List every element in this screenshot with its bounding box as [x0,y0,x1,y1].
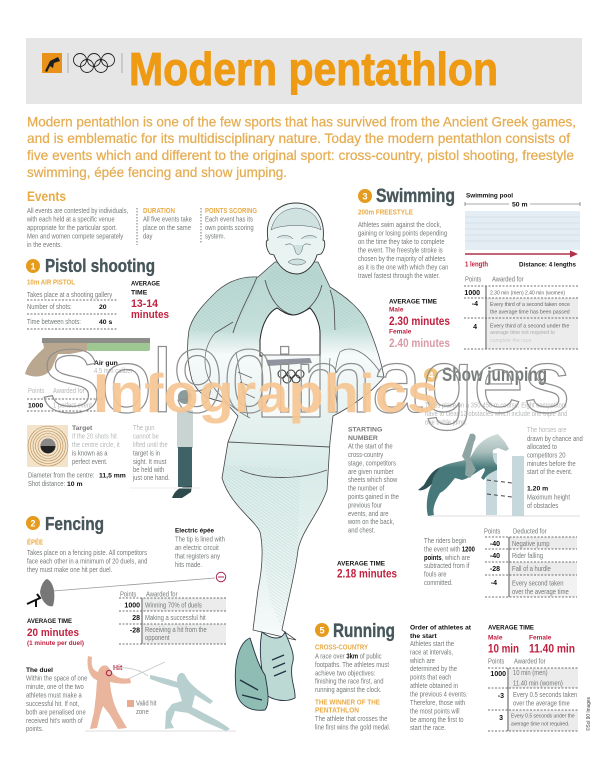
heading: fencing: 2 [30,518,36,528]
average time: (1 minute per duel) [27,640,84,647]
gun rule text [132,425,170,482]
average time: 13-14 [131,298,159,310]
freestyle description: gaining or losing points depending [358,230,447,238]
running average time: 2.18 minutes [337,566,397,580]
order of athletes: points that each [410,674,452,682]
average time: AVERAGE TIME [27,618,72,625]
horses text: drawn by chance and [527,436,583,443]
points table: -4 [472,301,478,308]
points table: Points [120,591,136,599]
points table: 1000 [464,290,480,297]
horses text: The horses are [527,427,567,434]
show jumping description: one treble jump. [425,419,467,427]
panel: events [26,188,257,249]
average time: Male [389,306,404,314]
electric épée: that registers any [175,553,221,561]
valid hit zone legend [127,700,157,716]
points table: Fall of a hurdle [512,566,551,573]
target text: is known as a [72,450,108,458]
Athens pictogram [42,53,62,73]
average time [389,298,450,350]
order of athletes: race at intervals, [410,649,453,657]
events description [26,208,128,249]
horses text [527,427,583,476]
pistol facts: Takes place at a shooting gallery [27,292,113,299]
order of athletes: Athletes start the [410,641,454,648]
average time: 2.30 minutes [389,314,450,328]
points table: Every third of a second under the [490,324,569,330]
average time: Male [488,634,503,642]
winner of the pentathlon: PENTATHLON [315,708,359,714]
points table [464,276,578,349]
duration: day [143,233,153,241]
heading: swimming [358,186,455,207]
freestyle description: Athletes swim against the clock, [358,222,441,229]
starting number text: sheets which show [348,477,398,484]
average time: AVERAGE [131,280,160,288]
shoe lacing [240,655,286,700]
starting number text [347,426,399,535]
the duel text: received hit's worth of [26,718,83,725]
average time: TIME [131,290,148,296]
target icon [27,425,68,467]
points table: Points [465,276,481,284]
épée description: face each other in a minimum of 20 duels, and [27,558,148,566]
heading: running: Running [333,621,395,642]
épée description: Takes place on a fencing piste. All competitors [27,550,147,557]
points table: Every third of a second taken once [490,302,570,308]
points scoring: POINTS SCORING [205,208,257,215]
red fencer [87,656,131,729]
the duel text: Within the space of one [26,675,88,683]
rider [462,434,476,478]
target measurements: 11,5 mm [99,472,126,480]
duration [143,208,192,241]
order of athletes: athlete obtained in [410,683,458,690]
intro text: Modern pentathlon is one of the few sports that has survived from the Ancient Greek games, [27,114,576,130]
horse tail [418,467,441,490]
target text: Target [72,425,93,432]
heading: fencing: Fencing [45,514,104,534]
panel: running [315,621,592,732]
winner of the pentathlon: THE WINNER OF THE [315,700,380,706]
blades [113,662,165,678]
gun rule text: The gun [133,425,155,432]
order of athletes: be among the first to [410,717,464,724]
fencers illustration [85,656,236,731]
heading: pistol shooting: Pistol shooting [45,256,155,276]
points table: 11.40 min (women) [513,680,563,688]
swimming pool diagram [465,192,580,268]
obstacle height: 1.20 m [527,486,548,492]
target text: perfect event. [72,459,108,466]
duration: All five events take [143,216,192,224]
freestyle description: chosen by the majority of athletes [358,256,445,263]
horses text: allocated to [527,444,557,451]
points table: 28 [132,615,140,622]
winner of the pentathlon: line first wins the gold medal. [315,724,391,732]
épée description: ÉPÉE [27,538,43,546]
target text: the centre circle, it [72,442,120,449]
points table: Every 0.5 seconds under the [511,714,575,720]
events description: Men and women compete separately [27,233,124,241]
runner left shoe [235,638,268,710]
target measurements [28,472,126,488]
horse and jump illustration [418,434,580,516]
points scoring: Each event has its [205,216,253,224]
points table: 10 min (men) [513,670,548,677]
average time [488,624,575,656]
runner illustration [188,203,384,710]
cross-country description: finishing the race first, and [315,678,384,686]
order of athletes: determined by the [410,666,457,673]
jump obstacle [486,453,524,516]
points table: Awarded for [514,658,546,666]
the duel text: athletes must make a [26,692,82,700]
electric épée [175,528,225,569]
target measurements: 10 m [67,481,82,488]
points table: Rider falling [512,553,543,560]
points table: average time not required to [490,330,555,336]
points table: Points [488,658,504,666]
copyright: ©Sol 90 Images [585,697,592,731]
target measurements: Shot distance: [28,481,65,488]
points scoring: own points scoring [205,225,254,232]
points table: 1000 [124,602,140,610]
cross-country description: footpaths. The athletes must [315,662,389,669]
runner right shoe [260,632,295,701]
points table: Points [28,388,44,395]
starting number text: cross-country [348,452,384,459]
pistol facts: 40 s [99,319,112,326]
intro text: five events which and different to the original sport: cross-country, pistol shooting, freestyle [27,147,574,163]
swimming pool diagram: Distance: 4 lengths [519,262,576,268]
the duel text: points. [26,726,43,733]
points table: complete the race. [490,338,533,344]
points table [484,528,577,597]
valid hit zone legend: zone [136,709,149,716]
heading: swimming: 3 [362,192,368,202]
points table [27,388,102,411]
points table: Receiving a hit from the [145,627,207,634]
electric épée: an electric circuit [175,545,219,552]
starting number text: points gained in the [348,494,399,501]
average time: 10 min [488,642,519,656]
runner arms [205,333,380,418]
average time: 2.40 minutes [389,336,450,350]
gun rule text: target is in [133,450,160,458]
chest highlight [260,308,320,356]
gun rule text: cannot be [133,433,159,441]
starting number text: NUMBER [348,435,378,442]
gun rule text: sight. It must [133,459,166,466]
heading: pistol shooting: 1 [30,262,36,272]
target text [72,425,120,466]
cross-country description [315,644,389,694]
heading: swimming: Swimming [376,186,455,207]
show jumping description [425,402,568,427]
average time: 20 minutes [27,627,79,639]
épée description: they must make one hit per duel. [27,567,112,574]
the duel text: The duel [26,667,53,674]
show jumping description: Takes place on a 350-450 m course. Eight competitors [425,402,567,410]
intro text: swimming, épée fencing and show jumping. [27,164,287,180]
pistol facts: 20 [99,304,107,311]
winner of the pentathlon [315,700,391,732]
runner singlet strokes [215,277,335,478]
starting number text: STARTING [348,426,382,434]
points table: over the average time [512,589,569,596]
points table: Winning 70% of duels [145,602,202,610]
points table: the average time has been passed [490,310,570,316]
order of athletes [409,624,472,732]
electric épée: The tip is lined with [175,536,225,544]
blue fencer [150,673,230,731]
air gun label: Air gun [94,360,118,367]
the duel text: successful hit. If not, [26,701,79,708]
points scoring [205,208,257,241]
swimming pool diagram: Swimming pool [466,192,513,200]
pistol facts [27,292,117,329]
panel: fencing [26,514,236,733]
freestyle description: travel fastest through the water. [358,273,440,280]
order of athletes: the start [410,633,438,640]
hit marker: Hit [113,665,123,672]
points table: -4 [491,580,497,587]
events description: with each held at a specific venue [26,216,115,224]
average time [27,618,84,647]
air gun label [94,360,133,375]
horses text: competitors 20 [527,452,566,460]
average time: Female [389,328,412,336]
points table: Points [484,528,500,536]
riders text: The riders begin [424,538,467,545]
shooter figure [130,390,200,498]
points table: Every second taken [512,580,564,588]
horses text: minutes before the [527,461,576,468]
freestyle description: the event. The freestyle stroke is [358,247,443,255]
watermark: Infographics: Infographics [93,362,439,424]
the duel text: both are penalised one [26,709,86,717]
panel: swimming [358,186,580,350]
gun rule text: be held with [133,467,165,474]
air gun label: 4.5 mm caliber [94,368,133,375]
points table [119,591,226,644]
freestyle description: on the time they take to complete [358,239,445,246]
heading: show jumping: 4 [428,370,434,380]
points table: -40 [490,541,500,548]
points table: over the average time [513,700,570,708]
points table: 1 perfect event [53,402,92,410]
shoulder hatching [189,262,367,630]
points table [488,658,578,731]
riders text: subtracted from if [424,563,470,570]
points table: Making a successful hit [145,615,206,622]
starting number text: events, and are [348,511,389,518]
order of athletes: start the race. [410,725,446,732]
cross-country description: running against the clock. [315,687,382,694]
épée description [27,538,148,574]
watermark: Sol90images outline: Sol90images [40,332,570,432]
points table: 2.30 min (men) 2.40 min (women) [490,290,565,296]
starting number text: are given number [348,469,394,476]
hit marker [106,665,123,676]
points table: Awarded for [492,276,524,284]
freestyle description: 200m FREESTYLE [358,210,413,216]
starting number text: worn on the back, [347,519,394,526]
heading: running: 5 [319,626,325,636]
points table: -28 [130,628,140,634]
panel: show jumping [418,365,583,597]
heading: fencing [26,514,104,534]
duration: place on the same [143,225,191,232]
cross-country description: CROSS-COUNTRY [315,644,368,652]
riders text [424,538,475,587]
header band [26,38,582,104]
pistol facts: Number of shots: [27,304,72,311]
points table: Deducted for [513,528,547,536]
electric épée: hits made. [175,562,202,569]
events description: appropriate for the particular sport. [27,225,117,232]
points table: 3 [499,715,503,722]
order of athletes: which are [409,658,435,665]
points table: -28 [490,566,500,573]
horse body [427,434,509,516]
icon: air gun [25,338,150,376]
points table: Every 0.5 seconds taken [513,692,578,699]
gun rule text: just one hand. [132,475,170,482]
winner of the pentathlon: The athlete that crosses the [315,716,388,723]
swimming pool diagram: 50 m [512,202,528,208]
freestyle description: as it is the one with which they can [358,264,449,272]
starting number text: previous four [348,502,383,510]
title: Modern pentathlon [129,43,498,95]
cross-country description: achieve two objectives: [315,670,376,678]
order of athletes: the previous 4 events. [410,691,468,699]
average time: Female [529,634,552,642]
runner head [266,203,325,274]
points scoring: system. [205,233,225,241]
electric épée: Electric épée [175,528,214,534]
points table: Negative jump [512,541,550,548]
points table: opponent [145,635,170,642]
starting number text: the number of [348,485,384,493]
the duel text: minute, one of the two [26,684,84,691]
order of athletes: Order of athletes at [410,624,472,632]
riders text: fouls are [424,571,447,579]
runner body [188,262,384,640]
freestyle description [358,210,449,280]
heading: show jumping: Show jumping [442,365,547,386]
cross-country description: A race over 3km of public [315,653,382,661]
points table: 1000 [28,402,43,410]
events description: in the events. [27,242,62,249]
points table: -3 [498,693,504,700]
order of athletes: Therefore, those with [410,700,466,707]
the duel text [26,667,88,733]
valid hit zone legend: Valid hit [136,700,157,708]
starting number text: At the start of the [348,443,393,451]
Olympic rings [68,53,122,73]
pistol facts: Time between shots: [27,319,81,326]
intro text: and is emblematic for its multidisciplinary nature. Today the modern pentathlon consists of [27,130,570,146]
runner face shading [271,208,321,265]
obstacle height: of obstacles [527,503,558,510]
points table: 4 [473,324,477,331]
running average time [337,560,397,580]
horses text: start of the event. [527,469,573,476]
points table: average time not required. [511,722,569,728]
points table: 1000 [490,671,506,678]
starting number text: and chest. [348,527,375,535]
starting number text: stage, competitors [348,460,396,468]
points table: -40 [490,553,500,560]
points table: Awarded for [53,388,85,395]
riders text: points, which are [424,555,470,562]
average time: 11.40 min [529,642,575,656]
duration: DURATION [143,208,175,215]
riders text: the event with 1200 [424,546,475,554]
running average time: AVERAGE TIME [337,560,385,568]
panel: pistol shooting [25,256,200,498]
average time: AVERAGE TIME [488,624,534,632]
riders text: committed. [424,580,453,587]
icon: épée [27,572,226,607]
average time [131,280,169,321]
target text: If the 20 shots hit [72,433,117,441]
target measurements: Diameter from the centre: [28,472,95,480]
gun rule text: lifted until the [133,442,168,449]
heading: running [315,621,395,642]
obstacle height [527,486,570,510]
intro text [27,114,576,180]
average time: minutes [131,309,169,321]
show jumping description: have to clear 12 obstacles which include one triple and [425,411,568,418]
swimming pool diagram: 1 length [465,262,488,268]
10m air pistol: 10m AIR PISTOL [27,280,76,286]
race bib with rings [262,355,320,417]
events description: All events are contested by individuals, [27,208,128,215]
obstacle height: Maximum height [527,494,570,502]
order of athletes: the most points will [410,708,460,716]
heading: events: Events [27,188,66,204]
average time: AVERAGE TIME [389,298,437,306]
points table: Awarded for [146,591,178,599]
